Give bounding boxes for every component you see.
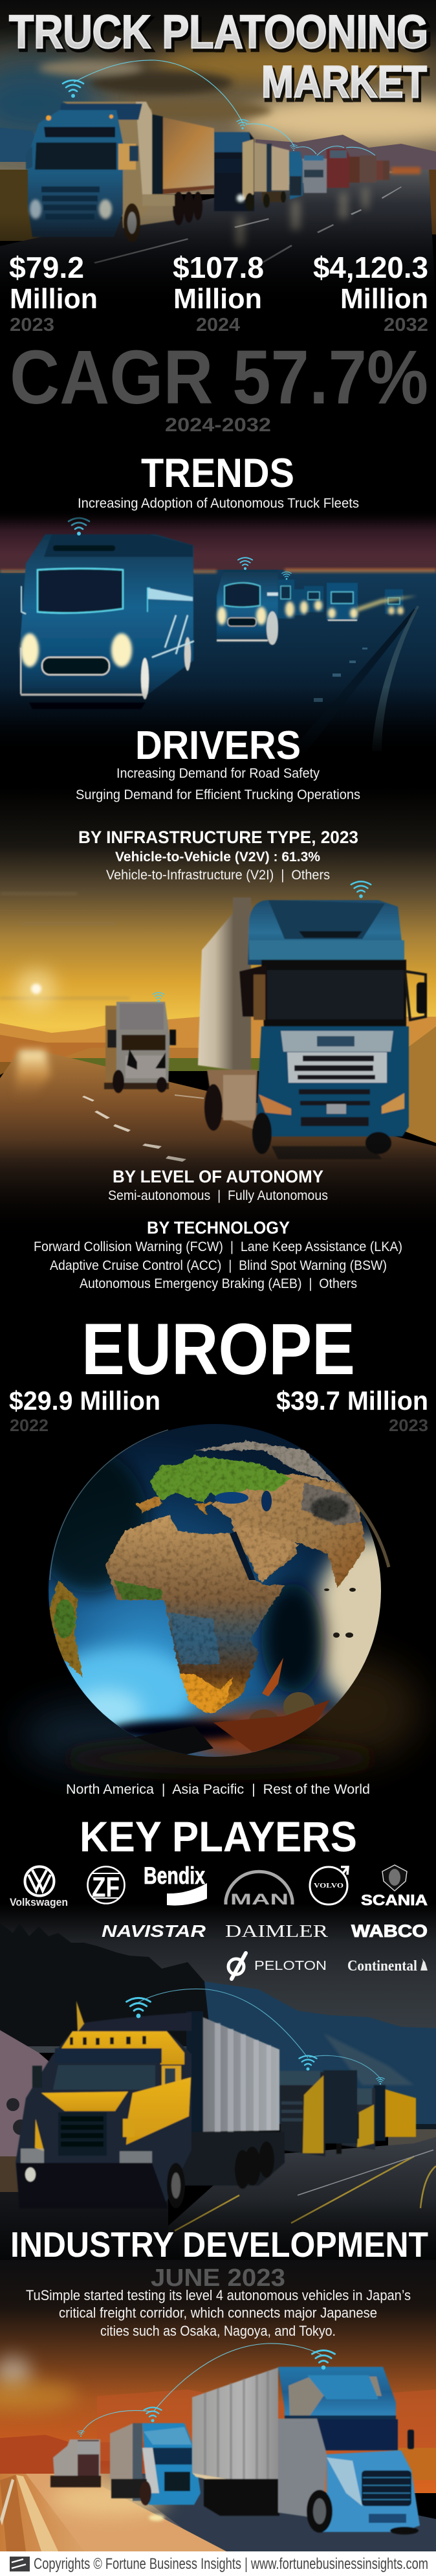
- logo: Continental: Continental: [347, 1958, 417, 1974]
- icon: wifi, second yellow truck: [299, 2056, 317, 2071]
- stat: 2032 market size: Million: [340, 283, 428, 315]
- drivers list: Surging Demand for Efficient Trucking Operations: [76, 787, 360, 802]
- far silver truck: [50, 2439, 101, 2487]
- development description: cities such as Osaka, Nagoya, and Tokyo.: [100, 2323, 336, 2339]
- icon: wifi signal, lead truck: [63, 80, 83, 98]
- lead truck: [26, 102, 214, 242]
- drivers list: Increasing Demand for Road Safety: [116, 766, 320, 781]
- large blue truck: [192, 2367, 420, 2535]
- icon: wifi, mid truck: [144, 2408, 162, 2423]
- stat: 2023 market size: Million: [10, 283, 98, 315]
- second truck: [214, 132, 289, 211]
- heading: Europe: EUROPE: [82, 1309, 355, 1390]
- infrastructure leading segment: Vehicle-to-Vehicle (V2V) : 61.3%: [115, 850, 320, 864]
- technology segments: Forward Collision Warning (FCW) | Lane Keep Assistance (LKA): [34, 1239, 402, 1254]
- lead yellow truck: [16, 2001, 285, 2208]
- icon: wifi, third yellow truck: [376, 2077, 384, 2085]
- footer bar: [0, 2551, 436, 2576]
- panel: industry development image: [0, 2260, 436, 2551]
- drivers list: [76, 766, 360, 802]
- heading: trends: TRENDS: [141, 451, 294, 496]
- logo: Daimler: DAIMLER: [225, 1921, 328, 1941]
- lead neon truck: [21, 534, 194, 709]
- heading: by technology: BY TECHNOLOGY: [147, 1218, 290, 1237]
- mid blue truck: [110, 2423, 201, 2521]
- stat: 2032 market size: $4,120.3: [313, 251, 428, 284]
- icon: wifi, far truck: [77, 2431, 85, 2437]
- trend description: Increasing Adoption of Autonomous Truck Fleets: [78, 496, 359, 511]
- autonomy segments: Semi-autonomous | Fully Autonomous: [108, 1188, 328, 1203]
- logo: ZF: ZF: [92, 1871, 120, 1903]
- development description: [26, 2287, 411, 2339]
- second yellow truck: [279, 2070, 357, 2156]
- heading: by infrastructure type: BY INFRASTRUCTURE TYPE, 2023: [78, 828, 358, 847]
- stat: 2032 market size: 2032: [384, 315, 428, 335]
- logo: Scania: SCANIA: [361, 1892, 428, 1908]
- stat: 2023 market size: $79.2: [9, 251, 84, 284]
- CAGR period: 2024-2032: [165, 414, 271, 436]
- illustration: globe highlighting Europe: [19, 1424, 430, 1774]
- title: [9, 6, 431, 110]
- icon: wifi, lead neon truck: [69, 518, 89, 536]
- stat: 2023 market size: 2023: [10, 315, 54, 335]
- logo: Bendix: [144, 1862, 207, 1906]
- date: JUNE 2023: [151, 2265, 285, 2292]
- development description: TuSimple started testing its level 4 autonomous vehicles in Japan’s: [26, 2287, 411, 2303]
- logo: Peloton: [228, 1953, 327, 1979]
- large blue truck: [198, 898, 427, 1159]
- icon: wifi, distant truck: [153, 993, 164, 1002]
- signal arcs between yellow trucks: [138, 1989, 382, 2080]
- heading: by level of autonomy: BY LEVEL OF AUTONOMY: [113, 1167, 323, 1186]
- logo: Navistar: NAVISTAR: [102, 1921, 206, 1941]
- logo: Wabco: WABCO: [351, 1921, 428, 1941]
- stat: Europe 2023: 2023: [389, 1416, 428, 1435]
- logo: Peloton: PELOTON: [254, 1959, 327, 1973]
- logo: Volkswagen: [10, 1866, 68, 1908]
- distant neon trucks: [278, 580, 417, 621]
- technology segments: Adaptive Cruise Control (ACC) | Blind Spot Warning (BSW): [50, 1258, 387, 1273]
- stat: 2032 market size: [313, 251, 428, 335]
- third yellow truck: [338, 2085, 416, 2150]
- panel: sunset highway image: [0, 806, 436, 1206]
- icon: wifi signal, second truck: [237, 120, 248, 130]
- logo: MAN: [226, 1871, 292, 1908]
- heading: drivers: DRIVERS: [135, 723, 301, 768]
- icon: wifi signal, third truck: [290, 145, 298, 151]
- icon: Fortune Business Insights logo: [10, 2557, 30, 2571]
- technology segments: [34, 1239, 402, 1291]
- stat: Europe 2022: [9, 1386, 160, 1435]
- signal arcs between trucks: [81, 2344, 322, 2434]
- logo: Bendix: Bendix: [144, 1862, 205, 1889]
- infrastructure other segments: Vehicle-to-Infrastructure (V2I) | Others: [106, 868, 330, 883]
- distant silver truck: [104, 1002, 176, 1093]
- second neon truck: [217, 570, 278, 645]
- icon: wifi, lead yellow truck: [127, 1998, 150, 2018]
- region list: North America | Asia Pacific | Rest of the World: [66, 1782, 370, 1797]
- stat: Europe 2023: [276, 1386, 428, 1435]
- far convoy of trucks: [289, 149, 420, 199]
- stat: Europe 2022: $29.9 Million: [9, 1386, 160, 1416]
- logo: MAN: MAN: [230, 1891, 289, 1908]
- icon: wifi, large truck: [312, 2351, 335, 2369]
- stat: 2024 market size: 2024: [196, 315, 240, 335]
- stat: 2024 market size: $107.8: [173, 251, 264, 284]
- icon: wifi, second neon truck: [238, 558, 252, 570]
- development description: critical freight corridor, which connects major Japanese: [59, 2305, 377, 2321]
- logo: Volvo: VOLVO: [314, 1882, 343, 1890]
- stat: 2024 market size: Million: [173, 283, 262, 315]
- logo: Volkswagen: Volkswagen: [10, 1896, 68, 1908]
- icon: wifi, third neon truck: [282, 572, 291, 580]
- signal arcs between trucks: [74, 60, 375, 155]
- icon: wifi, large truck: [351, 881, 371, 898]
- panel: key players highway image: [0, 1904, 436, 2266]
- stat: Europe 2023: $39.7 Million: [276, 1386, 428, 1416]
- logo: Scania: [361, 1865, 428, 1908]
- stat: Europe 2022: 2022: [10, 1416, 49, 1435]
- stat: 2023 market size: [9, 251, 98, 335]
- heading: key players: KEY PLAYERS: [80, 1813, 357, 1860]
- panel: hero image of truck platoon: [0, 0, 436, 271]
- stat: 2024 market size: [173, 251, 264, 335]
- panel: neon autonomous truck fleet image: [0, 508, 436, 754]
- logo: Volvo: [310, 1867, 348, 1904]
- technology segments: Autonomous Emergency Braking (AEB) | Others: [80, 1276, 357, 1291]
